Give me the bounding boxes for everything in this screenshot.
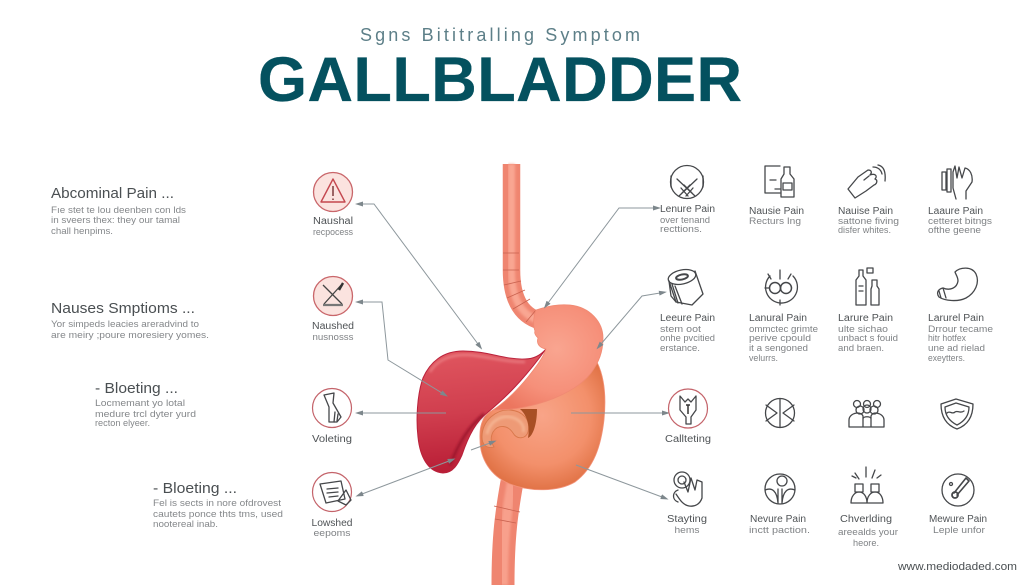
left text: abdominal pain: Abcominal Pain ... — [51, 185, 174, 202]
label: naushal — [313, 216, 353, 238]
item: larure pain — [838, 268, 898, 354]
pointer arrows — [362, 204, 663, 497]
left text: bloating one: Locmemant yo lotal — [95, 398, 185, 409]
lower intestine tube — [494, 482, 520, 585]
item: chverlding — [838, 467, 898, 549]
icon: warning triangle — [314, 172, 352, 212]
item: larure pain: and braen. — [838, 343, 884, 354]
item: larurel pain: Drrour tecame — [928, 324, 993, 335]
left text: abdominal pain — [51, 185, 186, 237]
icon: crossed utensils — [314, 276, 352, 316]
arrow: upper stomach top — [548, 208, 654, 303]
item: larurel pain: exeytters. — [928, 353, 965, 364]
left text: nausea symptoms: Nauses Smptioms ... — [51, 300, 195, 317]
icon: segmented circle — [766, 398, 794, 428]
right grid row 2 — [660, 267, 993, 364]
left text: bloating one: medure trcl dyter yurd — [95, 409, 196, 420]
icon: eyes with arrows — [765, 270, 797, 305]
item: lenure pain: Lenure Pain — [660, 204, 715, 215]
right grid row 1 — [660, 165, 992, 236]
subtitle: Sgns Bititralling Symptom — [360, 25, 640, 45]
icon: roll — [667, 267, 703, 305]
icon: head with crossed hands — [670, 166, 704, 198]
item: mewure pain — [929, 474, 987, 536]
item: chverlding: heore. — [853, 538, 879, 549]
item: leeure pain — [660, 267, 715, 354]
left text: abdominal pain: chall henpims. — [51, 226, 113, 237]
left text: nausea symptoms: are meiry ;poure moresiery yomes. — [51, 330, 209, 341]
item: nausie pain recturs: Nausie Pain — [749, 206, 804, 217]
item: leeure pain: erstance. — [660, 343, 700, 354]
icon: waving hand — [848, 165, 885, 198]
arrow: upper stomach side — [601, 293, 660, 344]
icon: bottles — [856, 268, 879, 305]
arrow: bloating to liver — [362, 412, 446, 414]
item: mewure pain: Mewure Pain — [929, 514, 987, 525]
item: lenure pain: recttions. — [660, 224, 702, 235]
icon: plant in circle — [765, 474, 795, 504]
esophagus tube — [503, 164, 545, 322]
icon: leg — [312, 388, 352, 428]
item: stayting hems: Stayting — [667, 514, 707, 525]
left text: bloating one: - Bloeting ... — [95, 380, 178, 397]
left text: abdominal pain: Fıe stet te lou deenben con lds — [51, 205, 186, 216]
label: naushal: recpocess — [313, 227, 353, 238]
arrow: lower left to liver tip — [362, 461, 449, 494]
icon: thermometer in circle — [942, 474, 974, 506]
item: larurel pain: hitr hotfex — [928, 333, 966, 344]
left text: bloating one: recton elyeer. — [95, 418, 150, 429]
icon: stomach — [938, 268, 977, 301]
icon: hand with coins — [674, 472, 702, 506]
item: nevure pain — [749, 474, 810, 536]
left text: bloating one — [95, 380, 196, 429]
item: stayting hems — [667, 472, 707, 536]
left text: bloating two — [153, 480, 283, 530]
lower stomach — [480, 362, 605, 490]
right grid row 3 — [665, 389, 973, 445]
item: callteting — [665, 389, 711, 445]
item: lanural pain: ommctec grimte — [749, 324, 818, 335]
item: lenure pain — [660, 166, 715, 235]
item: nausie pain sattone: Nauise Pain — [838, 206, 893, 217]
arrow: abdominal pain to liver top — [362, 204, 478, 344]
item: larurel pain: une ad rielad — [928, 343, 985, 354]
left text: bloating two: Fel is sects in nore ofdrovest — [153, 498, 281, 509]
item: larure pain: ulte sichao — [838, 324, 888, 335]
item: nevure pain: inctt paction. — [749, 525, 810, 536]
footer url: www.mediodaded.com — [897, 561, 1017, 573]
left text: bloating two: - Bloeting ... — [153, 480, 237, 497]
label: naushed — [312, 321, 354, 343]
arrow: lower stomach bottom — [576, 465, 662, 497]
item: lanural pain: perive cpould — [749, 333, 811, 344]
label: lowshed: Lowshed — [312, 518, 352, 529]
inner shadow — [520, 409, 537, 438]
item: lanural pain: velurrs. — [749, 353, 778, 364]
left text: nausea symptoms — [51, 300, 209, 341]
item: lanural pain: it a sengoned — [749, 343, 808, 354]
icon: shield — [941, 399, 973, 429]
item: stayting hems: hems — [674, 525, 700, 536]
right grid row 4 — [667, 467, 987, 549]
label: voleting: Voleting — [312, 434, 352, 445]
item: nausie pain recturs: Recturs Ing — [749, 216, 801, 227]
left text: bloating two: nootereal inab. — [153, 519, 218, 530]
curl — [482, 410, 529, 448]
item: nevure pain: Nevure Pain — [750, 514, 806, 525]
icon: group of people — [849, 400, 884, 427]
item: larure pain: Larure Pain — [838, 313, 893, 324]
item: lanural pain: Lanural Pain — [749, 313, 807, 324]
label: naushal: Naushal — [313, 216, 353, 227]
item: leeure pain: Leeure Pain — [660, 313, 715, 324]
left text: nausea symptoms: Yor simpeds leacies areradvind to — [51, 319, 199, 330]
icon: hand and bars — [942, 166, 972, 199]
icon: funnel in red circle — [668, 389, 708, 428]
anatomy illustration — [417, 164, 605, 585]
item: laaure pain: ofthe geene — [928, 225, 981, 236]
upper stomach — [493, 305, 603, 410]
item: leeure pain: onhe pvcitied — [660, 333, 715, 344]
arrow: lower stomach middle — [571, 412, 663, 414]
item: chverlding: Chverlding — [840, 514, 892, 525]
item: mewure pain: Leple unfor — [933, 525, 985, 536]
item: laaure pain — [928, 166, 992, 236]
label: lowshed: eepoms — [314, 528, 351, 539]
item: laaure pain: Laaure Pain — [928, 206, 983, 217]
item: laaure pain: cetteret bitngs — [928, 216, 992, 227]
item: callteting: Callteting — [665, 434, 711, 445]
label: naushed: nusnosss — [312, 332, 354, 343]
arrow: nausea to liver — [362, 302, 442, 393]
item: larurel pain: Larurel Pain — [928, 313, 984, 324]
item: chverlding: areealds your — [838, 527, 898, 538]
item: lenure pain: over tenand — [660, 215, 710, 226]
icon: two people with rays — [851, 467, 883, 503]
item: leeure pain: stem oot — [660, 324, 701, 335]
icon: document and bottle — [765, 166, 794, 197]
title: GALLBLADDER — [258, 45, 742, 115]
left text: abdominal pain: in sveers thex: they our tamal — [51, 215, 180, 226]
item: nausie pain sattone — [838, 165, 899, 236]
icon: document and hand — [312, 472, 352, 512]
item: nausie pain sattone: disfer whites. — [838, 225, 891, 236]
item: lanural pain — [749, 270, 818, 364]
item: nausie pain sattone: sattone fiving — [838, 216, 899, 227]
item: larurel pain — [928, 268, 993, 364]
label: lowshed — [312, 518, 352, 539]
item: nausie pain recturs — [749, 166, 804, 227]
item: larure pain: unbact s fouid — [838, 333, 898, 344]
left text: bloating two: cautets ponce thts tms, used — [153, 509, 283, 520]
liver — [417, 349, 546, 473]
arrow: duodenum segment — [471, 443, 490, 450]
label: naushed: Naushed — [312, 321, 354, 332]
